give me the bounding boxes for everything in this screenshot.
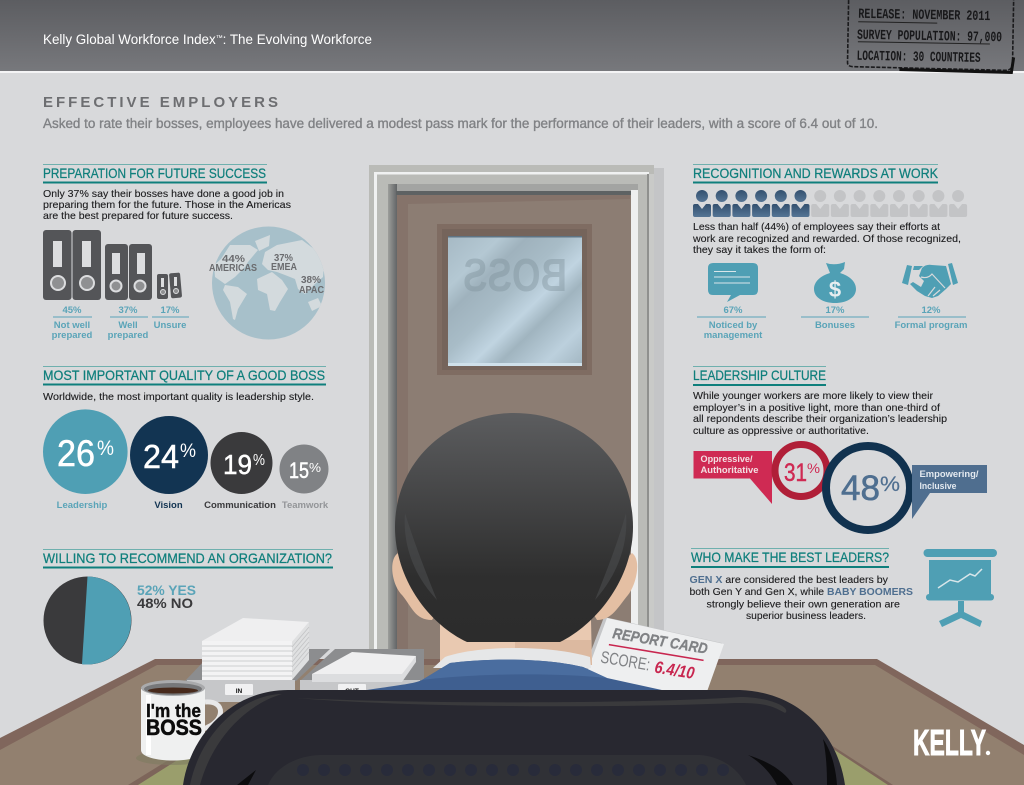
coffee mug (136, 680, 221, 765)
body text (690, 574, 913, 622)
out label (338, 684, 366, 695)
desk (0, 659, 1024, 785)
body text (43, 188, 291, 222)
binder labels: Well (118, 320, 138, 331)
body text: they say it takes the form of: (693, 244, 826, 256)
heading: RECOGNITION AND REWARDS AT WORK (693, 165, 939, 181)
door window: BOSS (463, 249, 567, 301)
callout: oppressive (694, 451, 772, 504)
recognition labels: management (704, 330, 763, 341)
circle: communication 19%: 19 (223, 449, 252, 480)
panel: leadership culture (693, 366, 987, 530)
binder labels: 37% (118, 305, 138, 316)
suit (355, 660, 680, 696)
door panel (397, 195, 631, 660)
binders (43, 230, 182, 300)
body text: While younger workers are more likely to view their (693, 390, 934, 402)
body text: work are recognized and rewarded. Of those recognized, (692, 233, 961, 245)
stamp: survey details (847, 0, 1015, 72)
panel: recognition and rewards (692, 164, 967, 341)
intro text: Asked to rate their bosses, employees have delivered a modest pass mark for the performance of their leaders, with a score of 6.4 out of 10. (43, 116, 878, 131)
heading: PREPARATION FOR FUTURE SUCCESS (43, 165, 266, 181)
ring: 48%: % (880, 473, 900, 496)
region labels: EMEA (271, 262, 297, 273)
region labels: 38% (301, 275, 321, 286)
body text: strongly believe their own generation are (706, 598, 900, 610)
people pictogram (693, 190, 967, 217)
circle: leadership 26%: Leadership (57, 500, 108, 511)
ring: 48%: 48 (841, 469, 880, 508)
circle: teamwork 15%: % (309, 460, 321, 475)
region labels: 37% (274, 253, 293, 264)
circle: vision 24%: 24 (143, 438, 179, 475)
region labels (209, 253, 324, 296)
circle: vision 24%: Vision (154, 500, 183, 511)
report card: REPORT CARD (611, 625, 709, 658)
callout: empowering (912, 465, 987, 519)
mug text (146, 701, 202, 740)
pie legend: 52% YES (137, 583, 196, 598)
binder labels: Unsure (154, 320, 186, 331)
body text: both Gen Y and Gen X, while BABY BOOMERS (690, 586, 913, 598)
callout: oppressive: Oppressive/ (700, 454, 753, 464)
in label: IN (236, 688, 243, 695)
circle: vision 24%: % (180, 441, 196, 462)
body text (693, 390, 947, 437)
body text: preparing them for the future. Those in the Americas (43, 199, 291, 211)
panel: preparation for future success (43, 164, 325, 341)
mug text: I'm the (146, 701, 201, 721)
body text: GEN X are considered the best leaders by (690, 574, 889, 586)
shirt collar (433, 648, 591, 668)
binder labels: 17% (160, 305, 180, 316)
heading: LEADERSHIP CULTURE (693, 367, 826, 383)
in and out trays (185, 618, 424, 702)
pie chart (44, 576, 132, 664)
callout: empowering: Empowering/ (920, 469, 979, 479)
boss figure: back of head (355, 413, 680, 696)
office chair (183, 690, 845, 785)
circle: leadership 26%: % (97, 437, 114, 460)
binder labels: Not well (54, 320, 90, 331)
body text: Less than half (44%) of employees say their efforts at (693, 221, 940, 233)
body text: all repondents describe their organization’s leadership (693, 413, 947, 425)
header title: Kelly Global Workforce Index (43, 32, 217, 47)
neck (440, 620, 592, 665)
circle: leadership 26% (43, 409, 128, 511)
circle: communication 19%: Communication (204, 500, 276, 511)
ring: 31%: 31 (784, 459, 807, 487)
region labels: 44% (222, 254, 245, 265)
recognition labels (697, 305, 967, 341)
panel: willing to recommend (43, 550, 333, 664)
region labels: APAC (299, 285, 324, 296)
ears (392, 553, 637, 620)
recognition labels: 67% (723, 305, 743, 316)
paper stack out (312, 652, 416, 682)
body text: Worldwide, the most important quality is leadership style. (43, 391, 314, 403)
Kelly logo (913, 722, 990, 763)
pie legend (137, 583, 196, 611)
ring: 48% (826, 446, 910, 530)
heading: MOST IMPORTANT QUALITY OF A GOOD BOSS (43, 367, 325, 383)
circle: teamwork 15%: Teamwork (282, 500, 329, 511)
door illustration (369, 165, 664, 660)
recognition labels: 17% (825, 305, 845, 316)
body text: culture as oppressive or authoritative. (693, 425, 869, 437)
body text: Only 37% say their bosses have done a good job in (43, 188, 284, 200)
region labels: AMERICAS (209, 263, 257, 274)
body text: are the best prepared for future success. (43, 210, 233, 222)
in label (225, 684, 253, 695)
binder labels (52, 305, 189, 341)
circle: teamwork 15% (280, 444, 329, 511)
pie legend: 48% NO (137, 596, 193, 611)
header band (0, 0, 1024, 73)
mug text: BOSS (146, 715, 202, 740)
heading: WILLING TO RECOMMEND AN ORGANIZATION? (43, 550, 332, 566)
heading: WHO MAKE THE BEST LEADERS? (691, 549, 889, 565)
out label: OUT (345, 688, 359, 695)
circle: communication 19% (204, 432, 276, 511)
recognition labels: 12% (921, 305, 941, 316)
main heading: EFFECTIVE EMPLOYERS (43, 94, 278, 111)
recognition labels: Formal program (895, 320, 967, 331)
report card: 6.4/10 (653, 658, 696, 683)
binder labels: prepared (108, 330, 149, 341)
icon: presentation board (924, 549, 997, 627)
circle: teamwork 15%: 15 (289, 458, 309, 483)
ring: 31%: % (807, 460, 820, 476)
body text (692, 221, 961, 256)
binder labels: 45% (62, 305, 82, 316)
door window (437, 224, 592, 375)
icon: speech bubble (708, 263, 758, 302)
paper stack in (202, 618, 309, 680)
circle: leadership 26%: 26 (57, 433, 95, 474)
body text: superior business leaders. (746, 610, 866, 622)
body text: employer’s in a positive light, more than one-third of (693, 402, 940, 414)
globe (209, 226, 325, 340)
ring: 31% (775, 444, 827, 496)
icon: handshake (902, 263, 958, 298)
header title: ™ (216, 35, 223, 42)
recognition labels: Noticed by (709, 320, 758, 331)
icon: money bag: $ (829, 277, 841, 302)
hair (395, 413, 633, 642)
binder labels: prepared (52, 330, 93, 341)
header title: : The Evolving Workforce (223, 32, 372, 47)
circle: communication 19%: % (253, 452, 265, 469)
icon: money bag (814, 262, 856, 303)
recognition labels: Bonuses (815, 320, 855, 331)
callout: oppressive: Authoritative (700, 465, 758, 475)
report card: SCORE: (599, 648, 652, 675)
panel: who make the best leaders (690, 548, 997, 627)
panel: most important quality (43, 366, 329, 511)
report card (580, 617, 724, 700)
circle: vision 24% (130, 416, 208, 511)
callout: empowering: Inclusive (920, 481, 956, 491)
